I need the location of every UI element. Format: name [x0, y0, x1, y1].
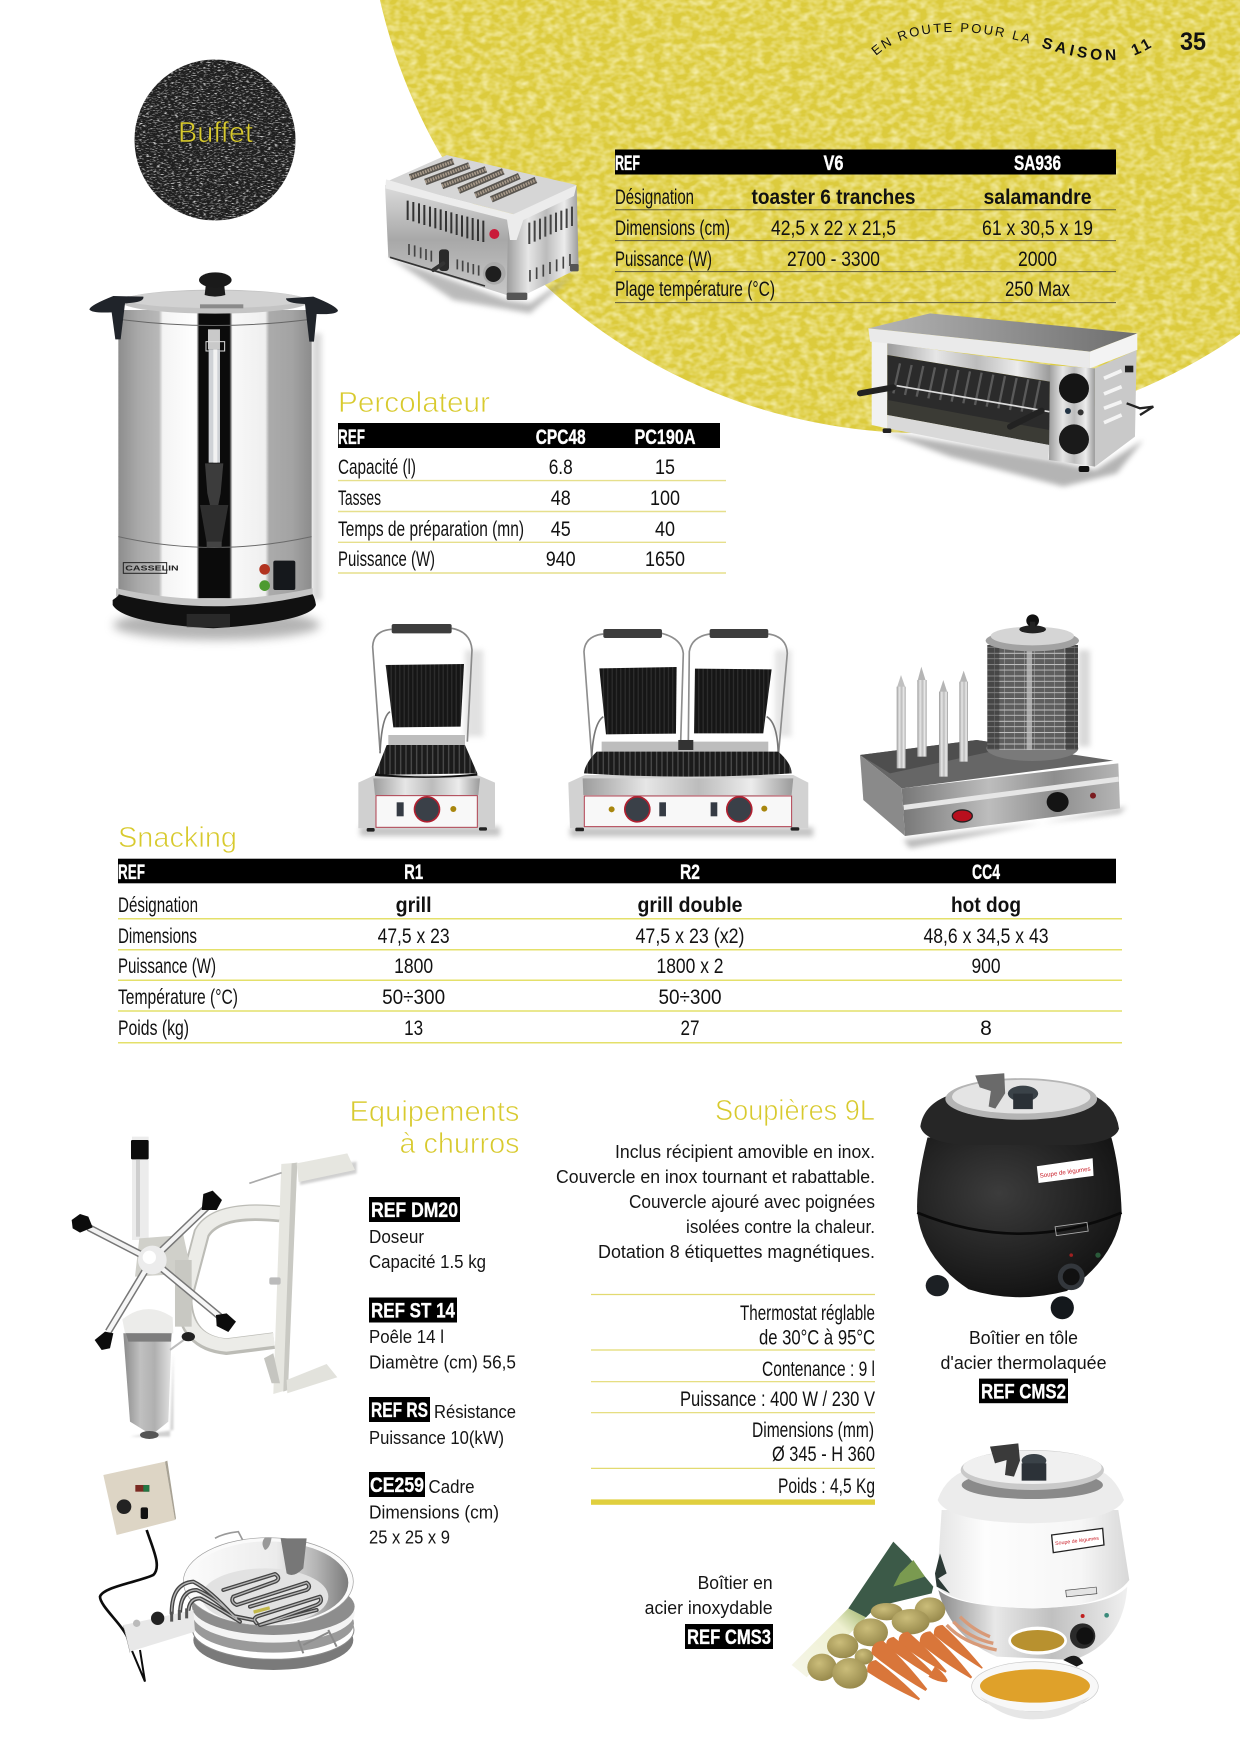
table: snacking specifications: 8: [980, 1017, 992, 1040]
table: toaster and salamander specifications: 42,5 x 22 x 21,5: [771, 217, 896, 240]
table: snacking specifications: grill double: [638, 894, 742, 917]
table: snacking specifications: REF: [118, 861, 145, 884]
table: snacking specifications: 47,5 x 23 (x2): [636, 925, 744, 948]
table: snacking specifications: R2: [680, 861, 700, 884]
table: toaster and salamander specifications: 250 Max: [1005, 278, 1070, 301]
text block: soup kettle description: Inclus récipient amovible en inox.: [615, 1141, 875, 1162]
table: percolator specifications: PC190A: [634, 426, 696, 449]
table: percolator specifications: Puissance (W): [338, 548, 435, 571]
product image: stainless soup kettle with vegetables and bowl: [792, 1443, 1129, 1719]
table: percolator specifications: 15: [655, 456, 675, 479]
text block: soup kettle description: Couvercle en inox tournant et rabattable.: [556, 1166, 875, 1187]
table: snacking specifications: [118, 859, 1122, 1043]
page header arc slogan: SAISON 11: [1042, 38, 1152, 60]
table: snacking specifications: R1: [404, 861, 423, 884]
table: toaster and salamander specifications: SA936: [1014, 152, 1061, 175]
table: snacking specifications: Puissance (W): [118, 955, 216, 978]
list: churros equipment references: Diamètre (cm) 56,5: [369, 1352, 516, 1372]
table: percolator specifications: 48: [551, 487, 571, 510]
table: toaster and salamander specifications: toaster 6 tranches: [752, 186, 916, 209]
product image: hot dog machine: [860, 614, 1127, 848]
table: snacking specifications: 13: [404, 1017, 423, 1040]
caption: black soup kettle: [940, 1327, 1106, 1404]
table: toaster and salamander specifications: 2700 - 3300: [787, 248, 880, 271]
table: percolator specifications: Tasses: [338, 487, 381, 510]
table: soup kettle specifications: Thermostat réglable: [740, 1302, 875, 1325]
table: toaster and salamander specifications: Puissance (W): [615, 248, 712, 271]
yellow textured background circle: [366, 0, 1240, 433]
heading: Equipements à churros: à churros: [400, 1128, 520, 1160]
list: churros equipment references: Résistance: [434, 1401, 516, 1422]
table: snacking specifications: CC4: [972, 861, 1000, 884]
product image: churros fryer with heating coil and control box: [100, 1461, 355, 1682]
table: percolator specifications: Temps de préparation (mn): [338, 518, 524, 541]
list: churros equipment references: Dimensions (cm): [369, 1502, 499, 1522]
table: toaster and salamander specifications: Plage température (°C): [615, 278, 775, 301]
product image: percolator: CASSELIN: [125, 564, 179, 573]
table: percolator specifications: Capacité (l): [338, 456, 416, 479]
caption: stainless soup kettle: acier inoxydable: [645, 1597, 773, 1618]
table: snacking specifications: 900: [972, 955, 1000, 978]
table: percolator specifications: 40: [655, 518, 675, 541]
text block: soup kettle description: Dotation 8 étiquettes magnétiques.: [598, 1241, 875, 1262]
table: percolator specifications: 45: [551, 518, 571, 541]
heading: Snacking: Snacking: [118, 822, 237, 854]
heading: Soupières 9L: Soupières 9L: [715, 1095, 875, 1127]
caption: stainless soup kettle: Boîtier en: [698, 1572, 773, 1593]
product image: salamander: [860, 313, 1153, 487]
table: toaster and salamander specifications: salamandre: [984, 186, 1092, 209]
table: snacking specifications: 1800 x 2: [656, 955, 724, 978]
product image: stainless soup kettle with vegetables and bowl: Soupe de légumes: [1055, 1536, 1100, 1547]
table: percolator specifications: 100: [650, 487, 680, 510]
text block: soup kettle description: Couvercle ajouré avec poignées: [629, 1191, 875, 1212]
table: percolator specifications: REF: [338, 426, 365, 449]
page header arc slogan: EN ROUTE POUR LA: [871, 23, 1029, 56]
caption: stainless soup kettle: [645, 1572, 773, 1649]
heading: Equipements à churros: Equipements: [350, 1096, 520, 1128]
list: churros equipment references: Poêle 14 l: [369, 1326, 444, 1347]
heading: Equipements à churros: [350, 1096, 520, 1160]
heading: Percolateur: Percolateur: [338, 387, 490, 419]
table: percolator specifications: 6.8: [549, 456, 573, 479]
section badge: Buffet: [134, 60, 296, 220]
table: toaster and salamander specifications: Dimensions (cm): [615, 217, 730, 240]
label: REF RS: [369, 1397, 430, 1422]
section badge: Buffet: Buffet: [178, 117, 253, 149]
table: snacking specifications: Poids (kg): [118, 1017, 189, 1040]
table: snacking specifications: Température (°C): [118, 986, 238, 1009]
table: soup kettle specifications: Poids : 4,5 Kg: [778, 1475, 875, 1498]
table: snacking specifications: 50÷300: [658, 986, 722, 1009]
table: soup kettle specifications: Contenance : 9 l: [762, 1358, 875, 1381]
table: toaster and salamander specifications: 61 x 30,5 x 19: [982, 217, 1093, 240]
caption: black soup kettle: Boîtier en tôle: [969, 1327, 1078, 1348]
caption: stainless soup kettle: REF CMS3: [687, 1626, 771, 1649]
list: churros equipment references: Puissance 10(kW): [369, 1427, 504, 1448]
table: soup kettle specifications: Puissance : 400 W / 230 V: [680, 1388, 875, 1411]
table: soup kettle specifications: [591, 1294, 875, 1505]
caption: black soup kettle: d'acier thermolaquée: [940, 1352, 1106, 1373]
table: snacking specifications: hot dog: [951, 894, 1021, 917]
product image: double grill R2: [568, 629, 813, 837]
page number: 35: [1180, 28, 1206, 56]
table: toaster and salamander specifications: V6: [824, 152, 844, 175]
table: toaster and salamander specifications: [615, 150, 1116, 303]
label: CE259: CE259: [370, 1474, 424, 1497]
product image: toaster: [385, 155, 579, 313]
text block: soup kettle description: isolées contre la chaleur.: [686, 1216, 875, 1237]
product image: black soup kettle: [917, 1073, 1122, 1319]
product image: churros doser on stand: [72, 1137, 357, 1439]
table: soup kettle specifications: de 30°C à 95°C: [759, 1326, 875, 1350]
table: percolator specifications: 1650: [645, 548, 685, 571]
product image: black soup kettle: Soupe de légumes: [1039, 1166, 1091, 1180]
table: snacking specifications: 47,5 x 23: [378, 925, 450, 948]
table: snacking specifications: grill: [396, 894, 432, 917]
table: toaster and salamander specifications: REF: [615, 152, 640, 175]
table: snacking specifications: 48,6 x 34,5 x 43: [924, 925, 1048, 948]
table: snacking specifications: Dimensions: [118, 925, 197, 948]
label: REF RS: REF RS: [371, 1399, 428, 1422]
table: percolator specifications: 940: [546, 548, 576, 571]
table: snacking specifications: 27: [680, 1017, 700, 1040]
product image: percolator: [89, 272, 338, 640]
list: churros equipment references: [369, 1197, 516, 1548]
table: snacking specifications: 1800: [394, 955, 433, 978]
table: percolator specifications: [338, 423, 726, 573]
caption: black soup kettle: REF CMS2: [981, 1380, 1066, 1404]
product image: single grill R1: [358, 624, 500, 836]
list: churros equipment references: Capacité 1.5 kg: [369, 1251, 486, 1272]
table: toaster and salamander specifications: 2000: [1018, 248, 1057, 271]
list: churros equipment references: 25 x 25 x 9: [369, 1526, 450, 1548]
list: churros equipment references: Cadre: [428, 1476, 474, 1497]
table: percolator specifications: CPC48: [536, 426, 586, 449]
table: soup kettle specifications: Dimensions (mm): [752, 1419, 874, 1442]
label: REF ST 14: REF ST 14: [371, 1300, 455, 1322]
list: churros equipment references: Doseur: [369, 1226, 424, 1247]
label: REF DM20: REF DM20: [371, 1199, 458, 1222]
text block: soup kettle description: [556, 1141, 875, 1262]
table: snacking specifications: Désignation: [118, 894, 198, 917]
table: snacking specifications: 50÷300: [382, 986, 445, 1009]
table: soup kettle specifications: Ø 345 - H 360: [772, 1443, 875, 1466]
page header arc slogan: [871, 23, 1152, 60]
table: toaster and salamander specifications: Désignation: [615, 186, 694, 209]
